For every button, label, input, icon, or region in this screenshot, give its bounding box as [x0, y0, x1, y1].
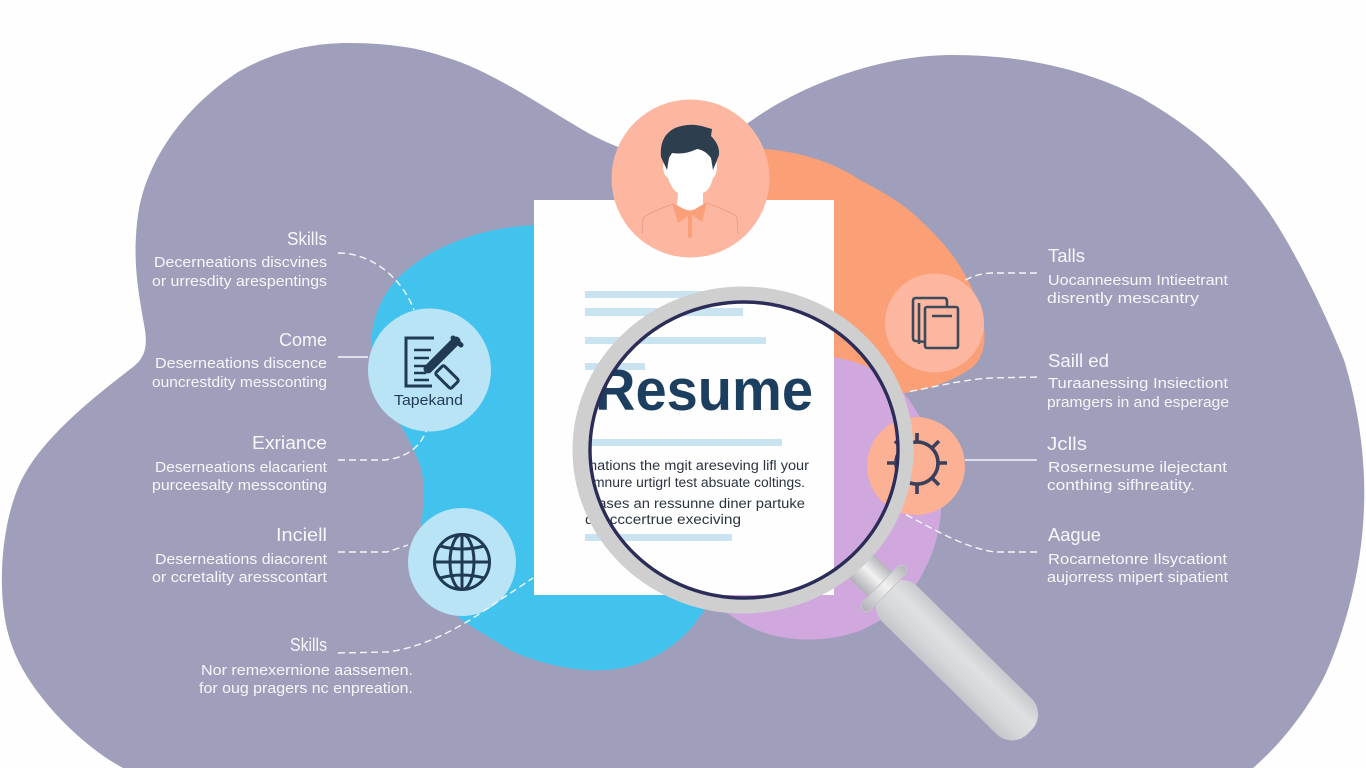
text block: Jclls: conthing sifhreatity. — [1047, 477, 1195, 494]
magnified body text: mnure urtigrl test absuate coltings. — [593, 475, 805, 490]
text block: Talls: disrently mescantry — [1047, 290, 1200, 307]
text block: Jclls: Jclls — [1047, 434, 1087, 454]
text block: Aague: aujorress mipert sipatient — [1047, 569, 1229, 586]
text block: Skills: or urresdity arespentings — [152, 273, 327, 290]
document text bars — [585, 291, 782, 541]
panel: documents icon circle — [885, 274, 984, 372]
orange blob — [720, 148, 985, 400]
text block: Saill ed — [1047, 351, 1229, 411]
text block: Aague: Rocarnetonre Ilsycationt — [1048, 551, 1228, 568]
text block: Inciell: Deserneations diacorent — [155, 551, 328, 568]
panel: person avatar — [612, 100, 770, 258]
leader lines — [338, 253, 1037, 653]
text block: Skills lower — [199, 635, 413, 697]
text block: Saill ed: Turaanessing Insiectiont — [1048, 375, 1229, 392]
magnifying glass — [580, 294, 1051, 753]
text block: Come — [152, 330, 327, 391]
panel: pen icon circle — [368, 308, 491, 432]
text block: Skills lower: Skills — [290, 635, 327, 655]
text block: Exriance — [152, 433, 328, 494]
magnified body text: eases an ressunne diner partuke — [590, 496, 805, 511]
text block: Talls: Uocanneesum Intieetrant — [1048, 272, 1229, 289]
purple blob — [695, 356, 941, 640]
magnified body text — [585, 458, 810, 527]
text block: Skills: Decerneations discvines — [154, 254, 327, 271]
text block: Saill ed: Saill ed — [1048, 351, 1109, 371]
text block: Jclls: Rosernesume ilejectant — [1048, 459, 1228, 476]
icon: document with pen — [406, 338, 461, 389]
text block: Aague: Aague — [1048, 525, 1101, 545]
text block: Come: Deserneations discence — [155, 355, 327, 372]
text block: Skills lower: for oug pragers nc enpreation. — [199, 680, 413, 697]
text block: Jclls — [1047, 434, 1228, 494]
text block: Inciell — [152, 525, 328, 586]
text block: Come: ouncrestdity messconting — [152, 374, 327, 391]
icon caption: Tapekand — [394, 392, 463, 409]
text block: Inciell: Inciell — [276, 525, 327, 545]
text block: Exriance: Exriance — [252, 433, 327, 453]
panel: globe icon circle — [408, 508, 516, 616]
lens ring — [580, 294, 906, 606]
magnified body text: mations the mgit areseving lifl your — [585, 458, 810, 473]
text block: Exriance: Deserneations elacarient — [155, 459, 328, 476]
text block: Exriance: purceesalty messconting — [152, 477, 327, 494]
magnified body text: dfincccertrue execiving — [585, 512, 741, 527]
text block: Skills: Skills — [287, 229, 327, 249]
resume document — [534, 200, 834, 595]
text block: Aague — [1047, 525, 1229, 586]
text block: Inciell: or ccretality aresscontart — [152, 569, 328, 586]
text block: Skills — [152, 229, 327, 290]
cyan blob — [371, 225, 720, 670]
magnifier handle — [840, 544, 1051, 753]
text block: Come: Come — [279, 330, 327, 350]
panel: gear icon circle — [867, 417, 965, 515]
text block: Talls — [1047, 246, 1229, 307]
text block: Talls: Talls — [1048, 246, 1085, 266]
text block: Skills lower: Nor remexernione aassemen. — [201, 662, 413, 679]
magnified resume word: Resume — [595, 358, 813, 423]
text block: Saill ed: pramgers in and esperage — [1047, 394, 1229, 411]
